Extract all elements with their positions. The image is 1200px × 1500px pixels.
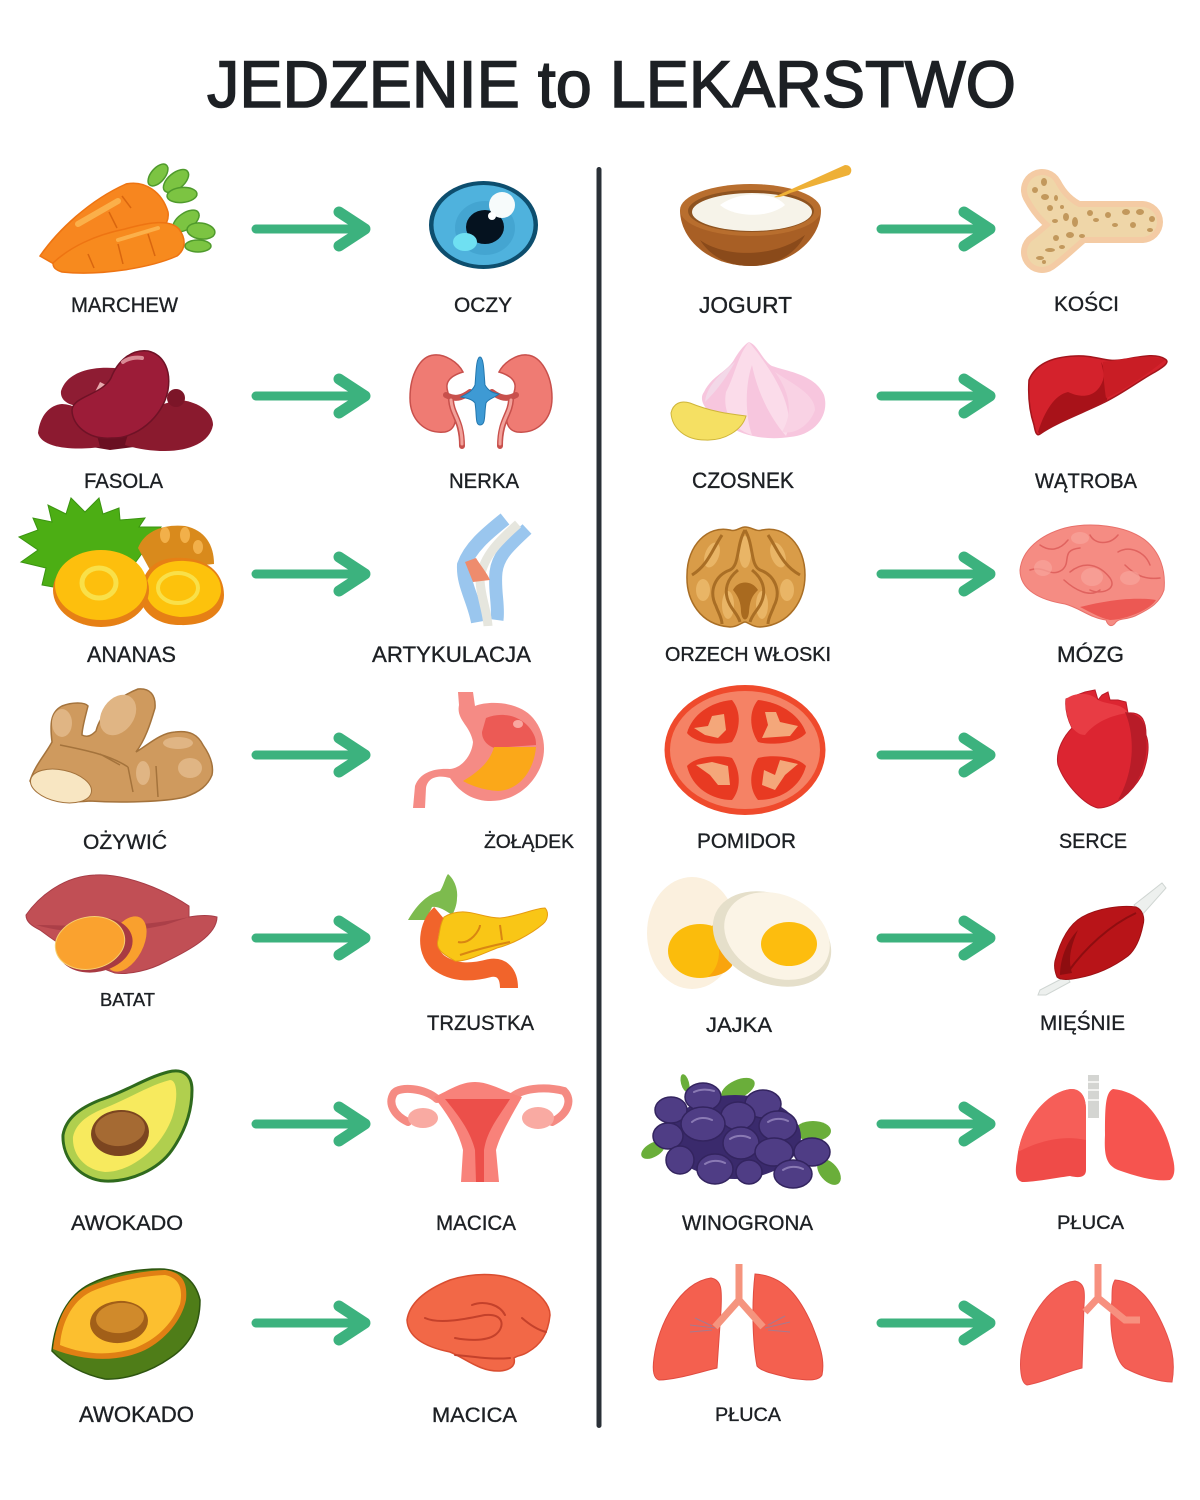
row 1 right: yogurt to bones [680,165,1155,266]
row 4 right: tomato to heart [664,685,1148,815]
label: AWOKADO: AWOKADO [79,1402,194,1427]
label: OŻYWIĆ: OŻYWIĆ [83,831,167,854]
icon: heart [1057,690,1148,808]
label: ŻOŁĄDEK: ŻOŁĄDEK [484,832,574,853]
icon: muscle [1038,883,1166,995]
icon: beans [38,351,213,451]
icon: tomato [664,685,826,815]
arrow [881,557,990,591]
arrow [881,379,990,413]
label: TRZUSTKA: TRZUSTKA [427,1012,534,1035]
icon: walnut [687,527,805,627]
icon: lungs [1016,1075,1174,1182]
arrow [881,921,990,955]
row 5 left: sweet potato to pancreas [26,874,547,988]
arrow [256,921,365,955]
arrow [256,1107,365,1141]
row 7 right: lungs to lungs [653,1264,1173,1385]
row 6 left: avocado to uterus [63,1071,568,1182]
label: WĄTROBA: WĄTROBA [1035,470,1137,493]
arrow [881,1107,990,1141]
icon: knee joint [464,519,527,626]
icon: cut avocado [52,1269,200,1379]
title: JEDZENIE to LEKARSTWO [207,47,1016,121]
label: MÓZG: MÓZG [1057,642,1124,667]
center divider [596,167,602,1428]
arrow [256,379,365,413]
row 1 left: carrot to eye [40,161,538,273]
label: SERCE: SERCE [1059,830,1127,853]
row 3 right: walnut to brain [687,525,1164,627]
label: JOGURT: JOGURT [699,292,792,318]
row 7 left: mango avocado to brain [52,1269,550,1379]
label: WINOGRONA: WINOGRONA [682,1212,813,1235]
label: MARCHEW: MARCHEW [71,294,178,317]
label: MACICA: MACICA [432,1404,517,1427]
arrow [256,738,365,772]
label: BATAT: BATAT [100,990,155,1010]
label: KOŚCI: KOŚCI [1054,292,1119,316]
row 2 left: beans to kidneys [38,351,552,451]
icon: uterus [391,1082,568,1182]
icon: stomach [413,692,544,808]
label: JAJKA: JAJKA [706,1014,772,1037]
row 2 right: garlic to liver [671,342,1167,440]
arrow [256,557,365,591]
icon: brain [1020,525,1164,626]
arrow [881,1306,990,1340]
row 5 right: eggs to muscle [647,873,1166,1005]
label: ANANAS: ANANAS [87,642,176,667]
label: POMIDOR: POMIDOR [697,830,796,853]
icon: grapes [638,1073,846,1189]
label: ORZECH WŁOSKI: ORZECH WŁOSKI [665,644,831,666]
icon: lungs [1021,1264,1173,1385]
arrow [881,212,990,246]
label: PŁUCA: PŁUCA [715,1405,781,1426]
icon: sweet potato [26,875,217,979]
icon: yogurt bowl [680,165,851,266]
icon: ginger [27,688,213,808]
row 3 left: pineapple to knee [19,498,527,627]
icon: pancreas [408,874,547,988]
label: CZOSNEK: CZOSNEK [692,468,794,493]
arrow [881,738,990,772]
arrow [256,1306,365,1340]
arrow [256,212,365,246]
icon: kidneys [410,355,552,446]
icon: eggs [647,873,847,1005]
icon: avocado [63,1071,192,1181]
label: MACICA: MACICA [436,1212,516,1235]
icon: garlic [671,342,825,440]
icon: pineapple [19,498,224,627]
icon: eye [429,181,538,269]
icon: bone [1032,178,1155,264]
label: MIĘŚNIE: MIĘŚNIE [1040,1011,1125,1035]
row 4 left: ginger to stomach [27,688,544,808]
icon: brain side view [407,1275,550,1371]
label: OCZY: OCZY [454,294,512,317]
icon: carrot [40,161,216,273]
icon: liver [1029,356,1167,435]
icon: lungs with bronchi [653,1264,823,1380]
label: AWOKADO: AWOKADO [71,1212,183,1235]
label: ARTYKULACJA: ARTYKULACJA [372,642,531,667]
row 6 right: grapes to lungs [638,1073,1174,1189]
label: PŁUCA: PŁUCA [1057,1213,1124,1234]
label: NERKA: NERKA [449,470,519,493]
label: FASOLA: FASOLA [84,470,163,493]
